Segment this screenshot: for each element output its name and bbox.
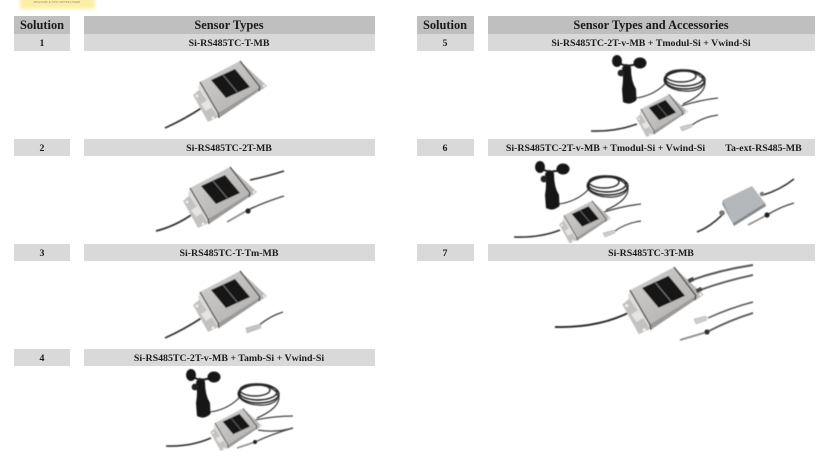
right column header: Sensor Types and Accessories: Sensor Types and Accessories — [573, 18, 729, 32]
row 6 label: Si-RS485TC-2T-v-MB + Tmodul-Si + Vwind-Si — [506, 143, 705, 154]
row 6 label: Ta-ext-RS485-MB — [725, 143, 802, 154]
row 1 label — [14, 34, 375, 51]
left column header: Sensor Types — [84, 16, 375, 34]
sensor image: solution 5 with wind sensor — [591, 55, 718, 137]
row 3 label: Si-RS485TC-T-Tm-MB — [180, 248, 279, 259]
left column header: Sensor Types: Sensor Types — [194, 18, 264, 32]
row 2 label — [14, 139, 375, 156]
row 5 label — [417, 34, 815, 51]
right column header: Sensor Types and Accessories — [488, 16, 815, 34]
right column header: Solution: Solution — [423, 18, 467, 32]
row 6 label: 6 — [443, 143, 448, 154]
row 1 label: Si-RS485TC-T-MB — [189, 38, 270, 49]
row 7 label: Si-RS485TC-3T-MB — [608, 248, 694, 259]
sensor image: solution 1 — [165, 61, 267, 128]
yellow label at top: MEASURE & TEST METER CHART — [34, 0, 81, 4]
sensor image: solution 7 — [555, 265, 753, 340]
row 4 label — [14, 349, 375, 366]
yellow label at top — [20, 0, 95, 9]
row 2 label: 2 — [40, 143, 45, 154]
sensor image: solution 2 — [156, 167, 284, 231]
sensor image: solution 6 with wind sensor — [514, 161, 641, 243]
left column header: Solution — [14, 16, 70, 34]
row 4 label: 4 — [40, 353, 45, 364]
row 5 label: 5 — [443, 38, 448, 49]
sensor image: solution 3 — [165, 271, 283, 338]
row 7 label: 7 — [443, 248, 448, 259]
left column header: Solution: Solution — [20, 18, 64, 32]
right column header: Solution — [417, 16, 474, 34]
accessory image: Ta-ext-RS485-MB junction box — [697, 179, 794, 232]
row 4 label: Si-RS485TC-2T-v-MB + Tamb-Si + Vwind-Si — [134, 353, 324, 364]
row 6 label — [417, 139, 815, 156]
sensor image: solution 4 with wind sensor — [166, 369, 293, 451]
row 5 label: Si-RS485TC-2T-v-MB + Tmodul-Si + Vwind-Si — [551, 38, 751, 49]
row 3 label: 3 — [40, 248, 45, 259]
row 3 label — [14, 244, 375, 261]
row 7 label — [417, 244, 815, 261]
row 2 label: Si-RS485TC-2T-MB — [186, 143, 272, 154]
row 1 label: 1 — [40, 38, 45, 49]
